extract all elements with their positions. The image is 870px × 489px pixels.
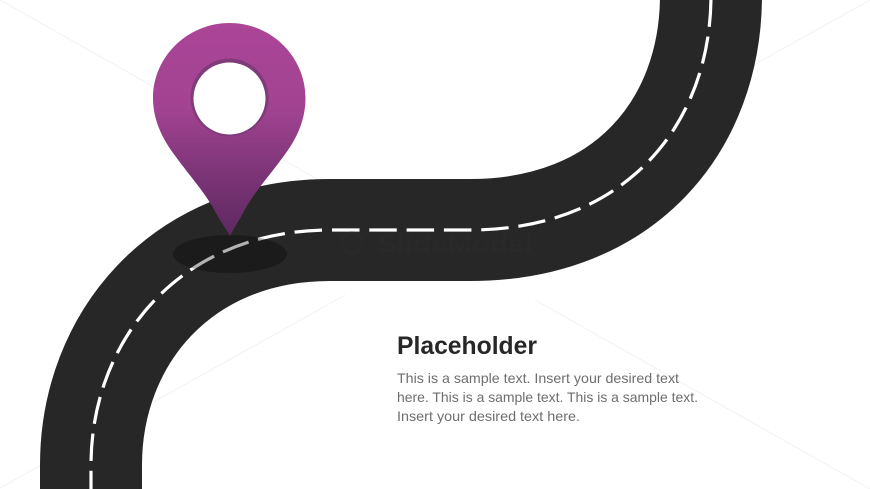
- heading: Placeholder: [397, 332, 537, 360]
- body text: [397, 370, 698, 424]
- road: [91, 0, 711, 489]
- watermark: [342, 231, 533, 258]
- body text: Insert your desired text here.: [397, 408, 580, 424]
- icon: location pin: [153, 23, 306, 236]
- body text: This is a sample text. Insert your desired text: [397, 370, 679, 386]
- watermark: SlideModel: [377, 231, 533, 258]
- road centre dashes: left section: [91, 230, 330, 489]
- pin shadow: [173, 235, 287, 273]
- road centre dashes: right section: [332, 0, 711, 230]
- body text: here. This is a sample text. This is a sample text.: [397, 389, 698, 405]
